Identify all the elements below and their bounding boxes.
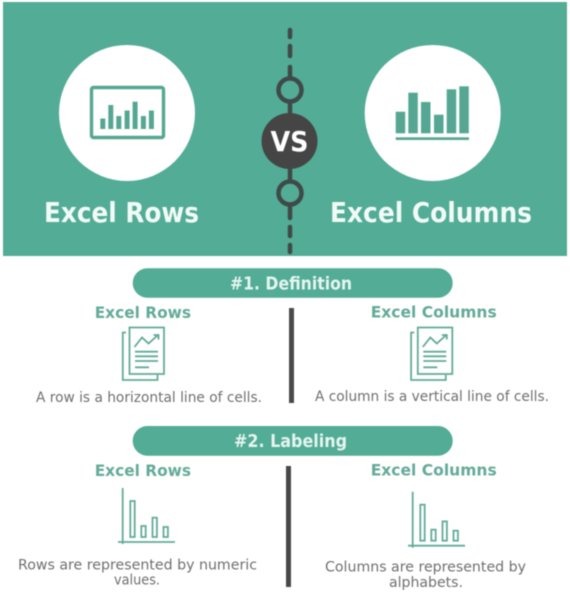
heading: excel columns: Excel Columns <box>330 197 532 229</box>
icon: excel rows circle <box>59 45 195 181</box>
heading: excel rows: Excel Rows <box>44 197 199 229</box>
divider <box>286 466 291 587</box>
heading pill: definition <box>133 268 453 298</box>
heading pill: definition: #1. Definition <box>230 274 352 294</box>
subheading: excel rows: Excel Rows <box>95 461 191 480</box>
vs badge <box>262 113 318 169</box>
section: definition <box>36 268 549 406</box>
heading pill: labeling <box>133 426 453 456</box>
header panel <box>3 2 567 256</box>
text: row labeling: values. <box>114 572 160 588</box>
icon: excel columns circle <box>365 45 501 181</box>
icon: bar chart right <box>408 492 465 548</box>
text: row labeling <box>18 558 257 588</box>
subheading: excel rows: Excel Rows <box>95 303 191 322</box>
subheading: excel columns: Excel Columns <box>371 302 497 322</box>
text: column labeling <box>325 560 526 591</box>
vs divider <box>262 30 318 252</box>
icon: bar chart left <box>118 488 175 544</box>
icon: report document left <box>123 328 164 380</box>
text: column labeling: alphabets. <box>389 575 463 591</box>
text: column labeling: Columns are represented by <box>325 560 526 576</box>
vs badge: VS <box>270 125 308 158</box>
text: row labeling: Rows are represented by numeric <box>18 558 257 574</box>
icon: report document right <box>411 328 452 380</box>
section: labeling <box>18 426 526 591</box>
text: row definition: A row is a horizontal line of cells. <box>36 390 262 406</box>
subheading: excel columns: Excel Columns <box>371 460 497 480</box>
text: column definition: A column is a vertical line of cells. <box>315 389 549 405</box>
heading pill: labeling: #2. Labeling <box>234 431 347 452</box>
divider <box>289 308 294 403</box>
